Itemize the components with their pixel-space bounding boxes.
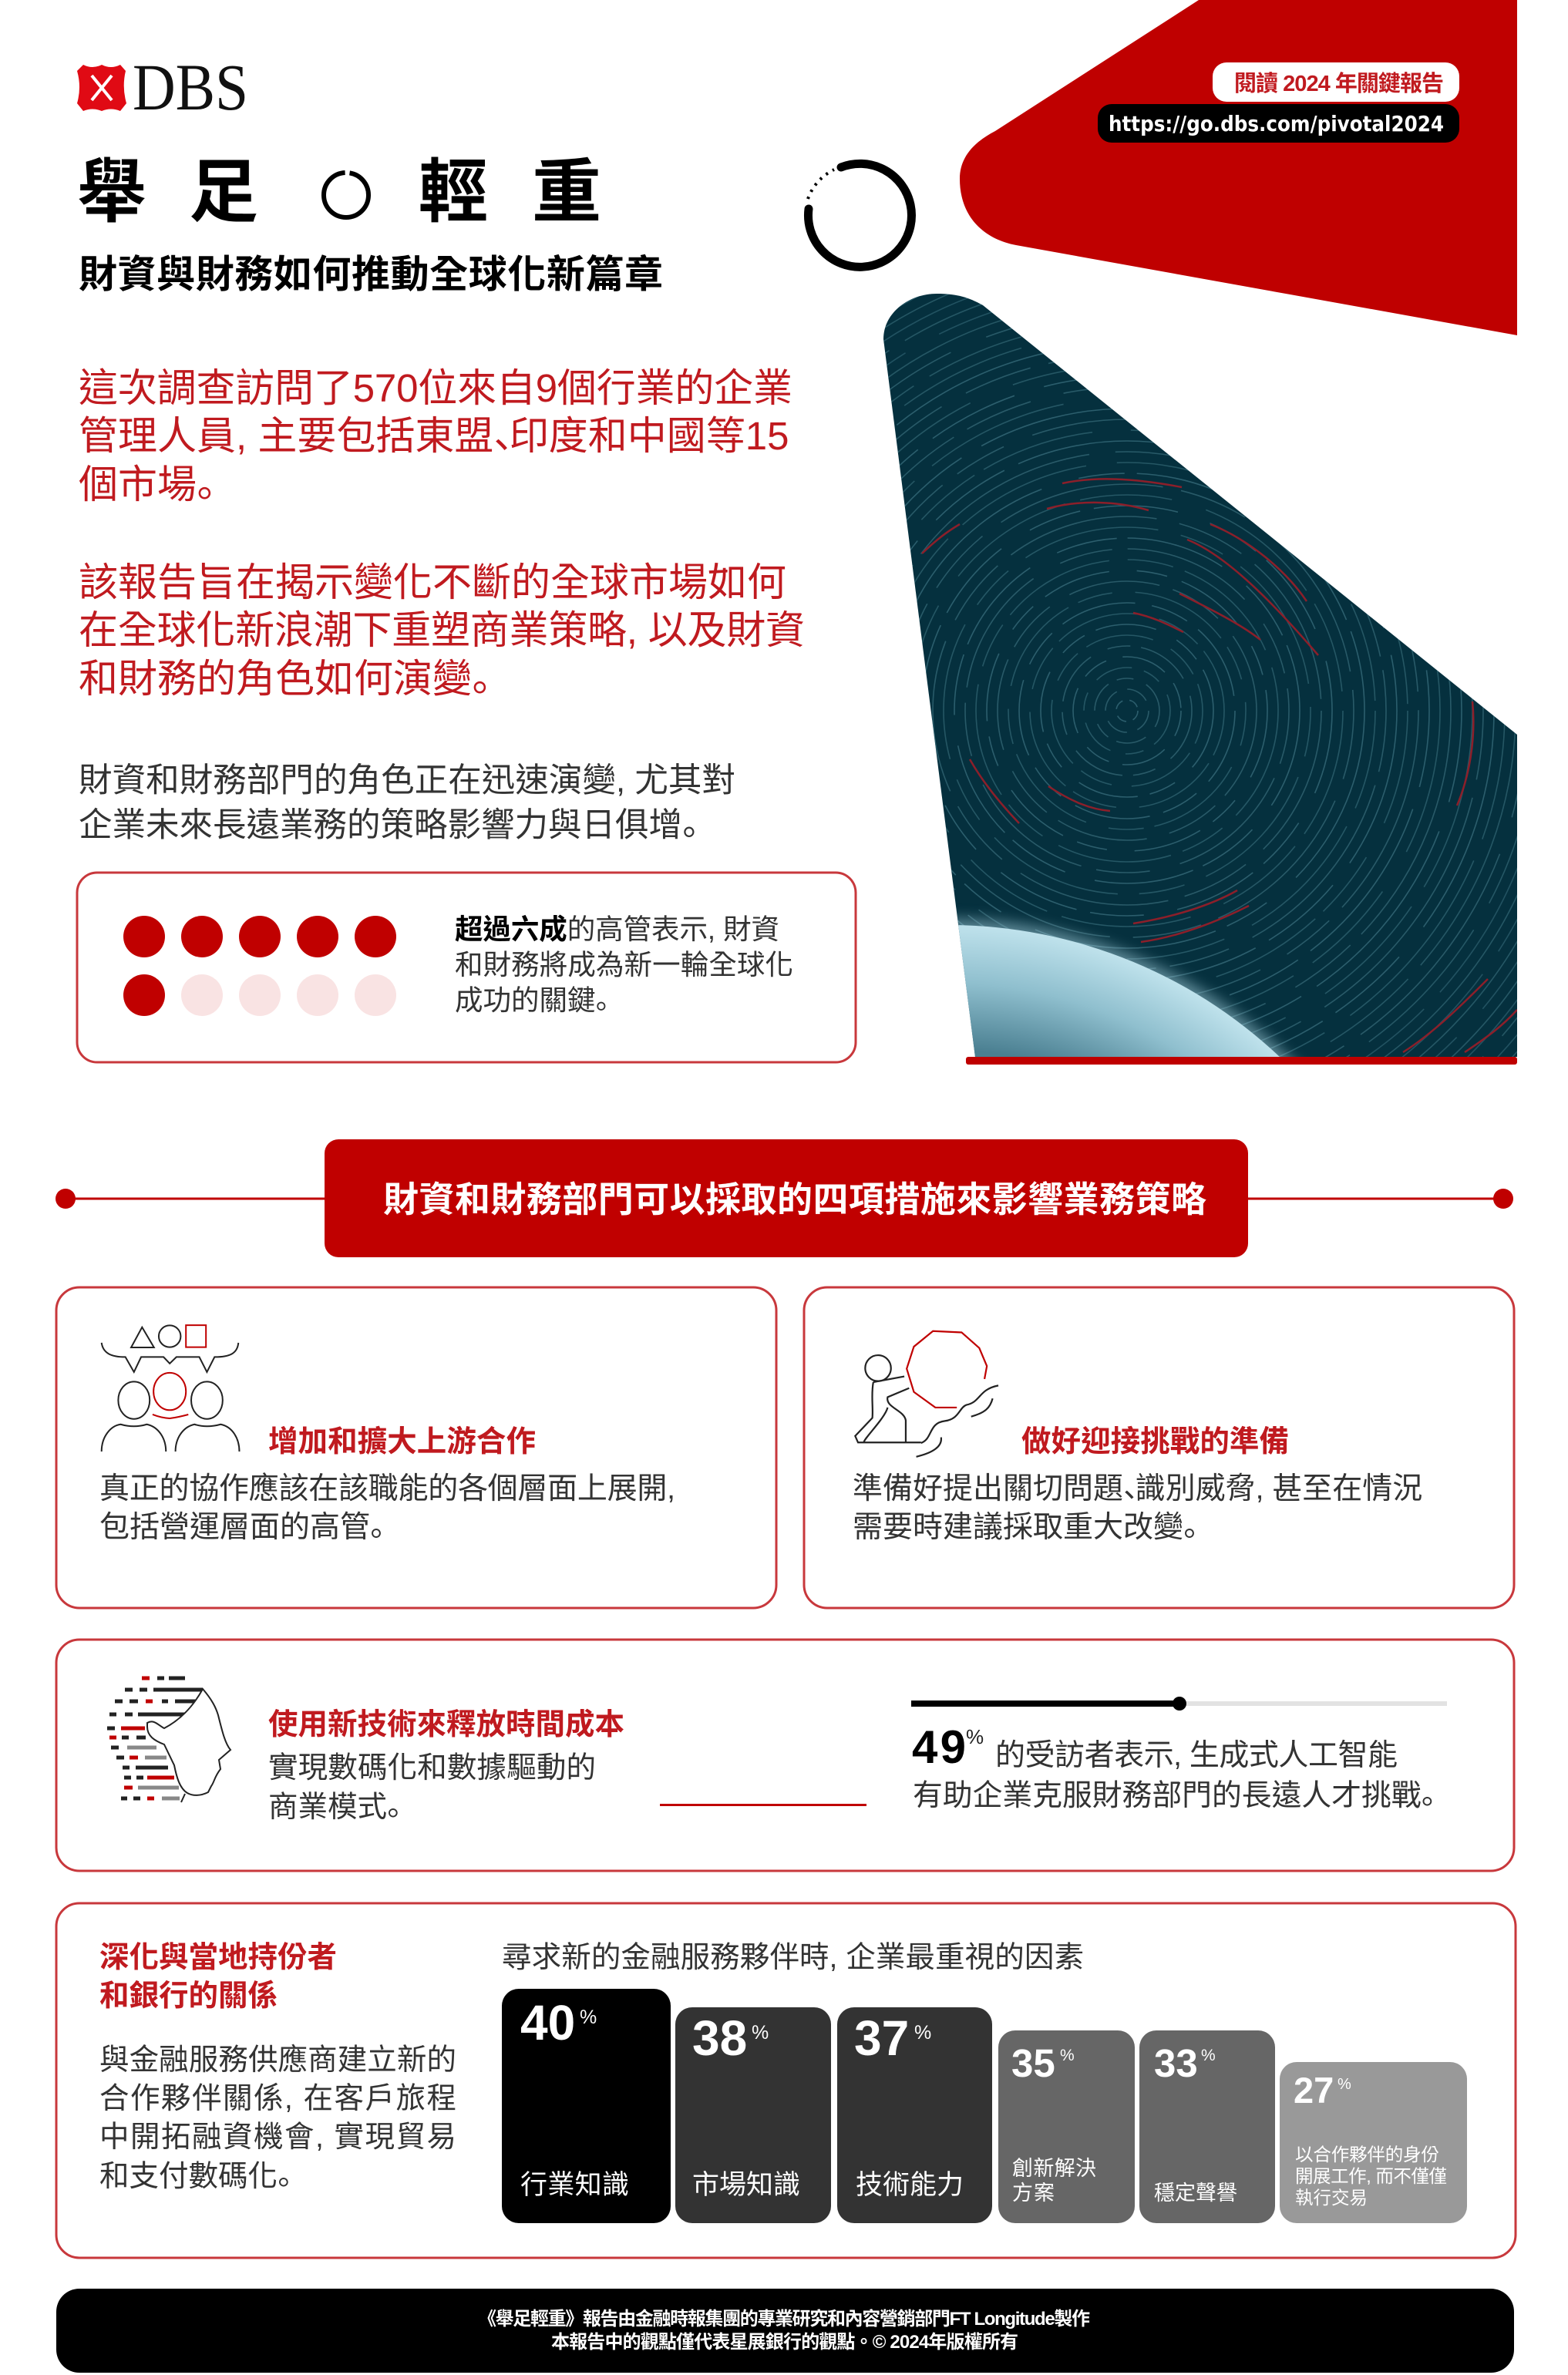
chart title: 尋求新的金融服務夥伴時, 企業最重視的因素: [502, 1941, 1084, 1974]
card body: 中開拓融資機會, 實現貿易: [99, 2121, 456, 2154]
card body: 與金融服務供應商建立新的: [99, 2044, 456, 2077]
icon: large progress ring: [808, 163, 911, 267]
card body: 識別威脅, 甚至在情況: [1136, 1472, 1422, 1505]
stat: 49 percent: 49: [912, 1721, 966, 1773]
card body: 。: [268, 2168, 298, 2201]
text block: report aim: 該報告旨在揭示變化不斷的全球市場如何: [79, 560, 786, 604]
callout text: 超過六成的高管表示, 財資: [455, 913, 779, 945]
bar: industry knowledge 40 percent: 行業知識: [520, 2170, 629, 2200]
text block: survey intro: 、: [482, 424, 521, 468]
section heading connector: [56, 1189, 1513, 1209]
bar: working as partner 27 percent: 以合作夥伴的身份: [1295, 2145, 1439, 2165]
text block: report aim: 和財務的角色如何演變: [79, 657, 472, 701]
bar: innovative solutions 35 percent: [998, 2030, 1135, 2223]
progress bar 49 percent: [911, 1697, 1447, 1711]
card body: 準備好提出關切問題: [853, 1472, 1123, 1505]
bar: innovative solutions 35 percent: 方案: [1012, 2182, 1055, 2205]
callout text: 和財務將成為新一輪全球化: [455, 949, 793, 981]
stat: 49 percent: %: [966, 1725, 984, 1748]
title: 舉: [77, 154, 146, 231]
card body: 。: [361, 1519, 391, 1552]
text block: survey intro: 個市場: [79, 463, 197, 506]
bar: stable reputation 33 percent: 33: [1154, 2041, 1198, 2085]
card body: 合作夥伴關係, 在客戶旅程: [99, 2082, 456, 2115]
footer: [56, 2289, 1514, 2373]
text block: report aim: 。: [460, 667, 500, 711]
card body: [268, 1751, 596, 1832]
callout text: 。: [587, 991, 615, 1023]
card body: 。: [378, 1798, 408, 1832]
stat: 49 percent: 的受訪者表示, 生成式人工智能: [995, 1739, 1398, 1772]
bar: stable reputation 33 percent: [1139, 2030, 1275, 2223]
bar: technical capability 37 percent: 37: [854, 2010, 909, 2066]
bar: innovative solutions 35 percent: 35: [1011, 2041, 1055, 2085]
callout text: 成功的關鍵: [455, 984, 595, 1016]
section heading banner: [325, 1139, 1248, 1257]
text block: role of treasury and finance: [79, 762, 735, 853]
title: 重: [532, 154, 601, 231]
bar: industry knowledge 40 percent: %: [580, 2007, 597, 2028]
text block: role of treasury and finance: 財資和財務部門的角色正在迅速演變, 尤其對: [79, 762, 735, 799]
bar: technical capability 37 percent: 技術能力: [856, 2170, 964, 2200]
text block: survey intro: [79, 366, 792, 516]
icon: person pushing boulder: [855, 1331, 998, 1457]
card body: 。: [1174, 1519, 1204, 1552]
card body: [99, 1472, 675, 1552]
panel: local stakeholders: [56, 1903, 1516, 2258]
footer: 本報告中的觀點僅代表星展銀行的觀點。© 2024年版權所有: [551, 2332, 1018, 2353]
card body: 商業模式: [268, 1791, 387, 1824]
card heading: 使用新技術來釋放時間成本: [268, 1708, 624, 1741]
pill: report URL: [1098, 104, 1459, 143]
bar: stable reputation 33 percent: 穩定聲譽: [1154, 2182, 1237, 2205]
bar: industry knowledge 40 percent: 40: [520, 1995, 575, 2050]
bar chart: partner factors: [502, 1989, 1467, 2223]
bar: technical capability 37 percent: %: [914, 2022, 931, 2044]
card heading: 做好迎接挑戰的準備: [1021, 1425, 1289, 1458]
bar: market knowledge 38 percent: 38: [692, 2010, 747, 2066]
bar: working as partner 27 percent: 開展工作, 而不僅僅: [1295, 2166, 1447, 2186]
card body: [99, 2044, 456, 2201]
red shape: report link banner: [960, 0, 1517, 335]
logo: DBS: DBS: [133, 50, 248, 124]
pill: report URL: https://go.dbs.com/pivotal2024: [1109, 111, 1444, 136]
title: 輕: [419, 154, 488, 231]
red rule under image: [966, 1057, 1517, 1065]
stat: 49 percent: 有助企業克服財務部門的長遠人才挑戰: [913, 1779, 1422, 1812]
pill: report label: 閱讀 2024 年關鍵報告: [1234, 71, 1444, 96]
card heading: [99, 1941, 337, 2013]
card heading: 深化與當地持份者: [99, 1941, 337, 1974]
card body: [853, 1472, 1422, 1552]
stat: 49 percent: 。: [1412, 1787, 1442, 1820]
card body: 需要時建議採取重大改變: [853, 1511, 1183, 1544]
text block: survey intro: 。: [185, 473, 224, 516]
bar: working as partner 27 percent: 27: [1294, 2070, 1334, 2111]
text block: report aim: [79, 560, 805, 711]
title: 足: [189, 154, 258, 231]
icon: dot grid six of ten: [123, 916, 396, 1016]
bar: stable reputation 33 percent: %: [1201, 2047, 1216, 2064]
card body: 和支付數碼化: [99, 2160, 278, 2193]
panel: six in ten callout: [77, 873, 856, 1062]
stat: 49 percent: [912, 1721, 1442, 1820]
bar: industry knowledge 40 percent: [502, 1989, 671, 2223]
bar: innovative solutions 35 percent: %: [1060, 2047, 1075, 2064]
bar: working as partner 27 percent: %: [1338, 2076, 1351, 2093]
bar: market knowledge 38 percent: [675, 2007, 831, 2223]
subtitle: 財資與財務如何推動全球化新篇章: [79, 253, 663, 296]
card body: 、: [1114, 1480, 1144, 1513]
icon: data head: [107, 1678, 203, 1798]
footer: 《舉足輕重》報告由金融時報集團的專業研究和內容營銷部門FT Longitude製作: [478, 2308, 1090, 2330]
text block: report aim: 在全球化新浪潮下重塑商業策略, 以及財資: [79, 608, 805, 652]
icon: collaborating people: [102, 1325, 239, 1452]
panel: prepare for challenges: [804, 1287, 1514, 1608]
text block: survey intro: 這次調查訪問了570位來自9個行業的企業: [79, 366, 792, 410]
card heading: 和銀行的關係: [99, 1980, 278, 2013]
bar: working as partner 27 percent: 執行交易: [1295, 2188, 1368, 2208]
text block: role of treasury and finance: 。: [672, 816, 705, 853]
card heading: 增加和擴大上游合作: [268, 1425, 536, 1458]
callout text: [455, 913, 793, 1023]
bar: working as partner 27 percent: [1280, 2062, 1467, 2223]
panel: upstream collaboration: [56, 1287, 776, 1608]
bar: innovative solutions 35 percent: 創新解決: [1012, 2157, 1096, 2180]
section heading banner: 財資和財務部門可以採取的四項措施來影響業務策略: [383, 1179, 1206, 1219]
bar: market knowledge 38 percent: 市場知識: [692, 2170, 800, 2200]
card body: 包括營運層面的高管: [99, 1511, 370, 1544]
red rule: [660, 1804, 866, 1806]
bar: market knowledge 38 percent: %: [752, 2022, 769, 2044]
text block: survey intro: 印度和中國等15: [510, 414, 789, 458]
text block: role of treasury and finance: 企業未來長遠業務的策略影響力與日俱增: [79, 807, 682, 844]
panel: new technology: [56, 1640, 1514, 1871]
pill: report label: [1213, 62, 1459, 102]
logo: DBS: [77, 50, 248, 124]
image: star trails and planet: [883, 294, 1517, 1057]
text block: survey intro: 管理人員, 主要包括東盟: [79, 414, 493, 458]
title: [77, 154, 601, 231]
card body: 真正的協作應該在該職能的各個層面上展開,: [99, 1472, 675, 1505]
card body: 實現數碼化和數據驅動的: [268, 1751, 596, 1785]
bar: technical capability 37 percent: [837, 2007, 992, 2223]
